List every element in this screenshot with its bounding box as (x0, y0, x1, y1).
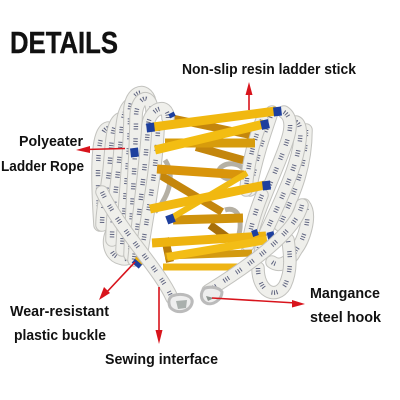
label: polyester ladder rope (1, 133, 84, 175)
left rope bundle (98, 93, 168, 260)
arrow: to steel hook (212, 298, 305, 308)
label: wear-resistant plastic buckle: Wear-resistant (10, 303, 109, 320)
arrow: to rope (76, 146, 125, 153)
back hoops of rope (155, 160, 245, 245)
back rungs (160, 118, 255, 262)
label: wear-resistant plastic buckle (10, 303, 109, 344)
arrow: to buckle (99, 262, 135, 300)
left steel hook rope (102, 192, 192, 312)
arrow: to ladder stick (246, 82, 252, 110)
right rope bundle (246, 112, 307, 264)
rope ladder photo (98, 93, 307, 312)
label: non-slip resin ladder stick: Non-slip resin ladder stick (182, 61, 357, 78)
right steel hook rope (201, 205, 302, 304)
label: sewing interface: Sewing interface (105, 351, 218, 368)
label: polyester ladder rope: Ladder Rope (1, 158, 84, 175)
blue plastic buckles (134, 107, 278, 240)
label: manganese steel hook (310, 285, 382, 326)
label: polyester ladder rope: Polyeater (19, 133, 83, 150)
label: manganese steel hook: steel hook (310, 309, 382, 326)
label: manganese steel hook: Mangance (310, 285, 380, 302)
arrow: to sewing interface (156, 287, 162, 344)
front rungs (150, 111, 276, 267)
label: wear-resistant plastic buckle: plastic buckle (14, 327, 106, 344)
title: DETAILS (10, 25, 118, 60)
lower buckle (134, 256, 144, 266)
